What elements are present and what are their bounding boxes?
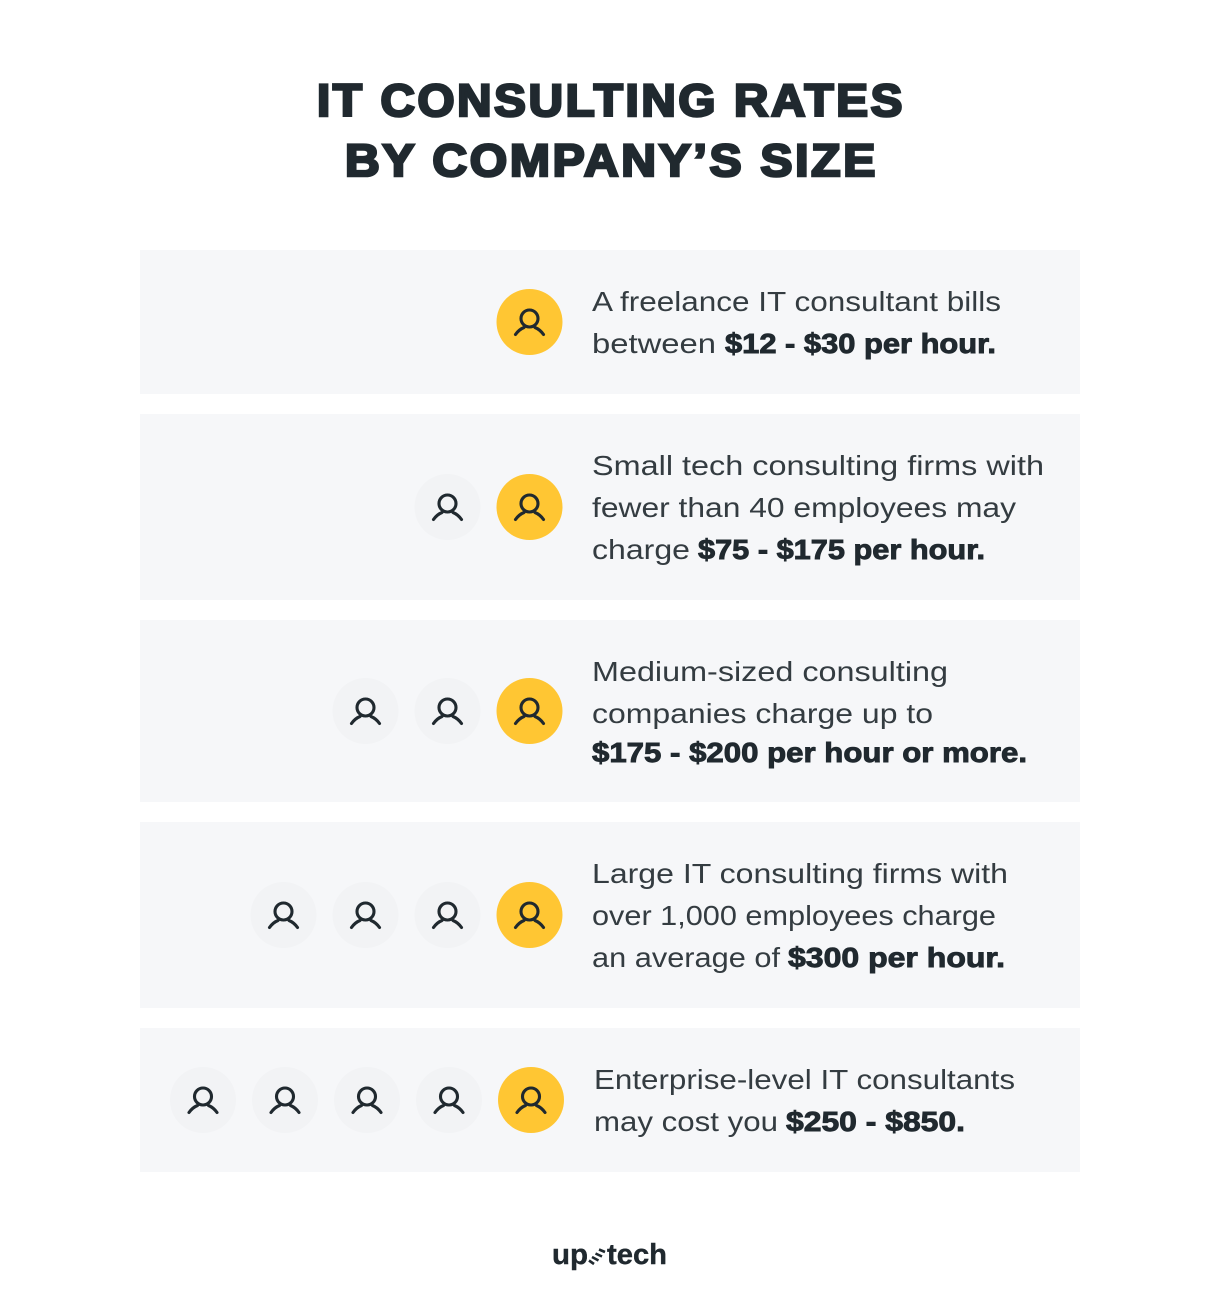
text: small firm rate: $75 - $175 per hour.: [698, 534, 985, 565]
text: freelance rate: A freelance IT consultant bills: [592, 286, 1001, 317]
panel: freelance consultant: [140, 250, 1080, 394]
logo: uptech: [552, 1239, 667, 1271]
text: large firm rate: Large IT consulting firms with: [592, 858, 1008, 889]
text: freelance rate: [592, 286, 1001, 359]
logo: uptech: tech: [607, 1239, 667, 1271]
text: small firm rate: charge: [592, 534, 690, 565]
text: medium company rate: [592, 656, 1027, 768]
panel: small firms: [140, 414, 1080, 600]
text: enterprise rate: may cost you: [594, 1106, 778, 1137]
text: medium company rate: Medium-sized consulting: [592, 656, 948, 687]
icons: five people: [170, 1067, 564, 1133]
text: small firm rate: [592, 450, 1044, 565]
icons: two people: [414, 474, 562, 540]
text: freelance rate: between: [592, 328, 716, 359]
icons: three people: [332, 678, 562, 744]
text: large firm rate: [592, 858, 1008, 973]
panel: enterprise: [140, 1028, 1080, 1172]
icons: four people: [250, 882, 562, 948]
text: small firm rate: fewer than 40 employees may: [592, 492, 1016, 523]
logo: uptech: up: [552, 1239, 588, 1271]
icon: highlighted person: [496, 289, 562, 355]
text: enterprise rate: $250 - $850.: [786, 1106, 965, 1137]
icon: logo mark: [589, 1250, 605, 1264]
title: BY COMPANY’S SIZE: [345, 135, 878, 186]
text: enterprise rate: Enterprise-level IT consultants: [594, 1064, 1015, 1095]
title: IT CONSULTING RATES: [317, 75, 905, 126]
text: large firm rate: $300 per hour.: [788, 942, 1005, 973]
text: large firm rate: over 1,000 employees charge: [592, 900, 996, 931]
text: freelance rate: $12 - $30 per hour.: [725, 328, 996, 359]
text: large firm rate: an average of: [592, 942, 780, 973]
text: medium company rate: $175 - $200 per hour or more.: [592, 737, 1027, 768]
text: medium company rate: companies charge up to: [592, 698, 933, 729]
text: enterprise rate: [594, 1064, 1015, 1137]
title: [317, 75, 905, 186]
text: small firm rate: Small tech consulting firms with: [592, 450, 1044, 481]
panel: large firms: [140, 822, 1080, 1008]
panel: medium companies: [140, 620, 1080, 802]
